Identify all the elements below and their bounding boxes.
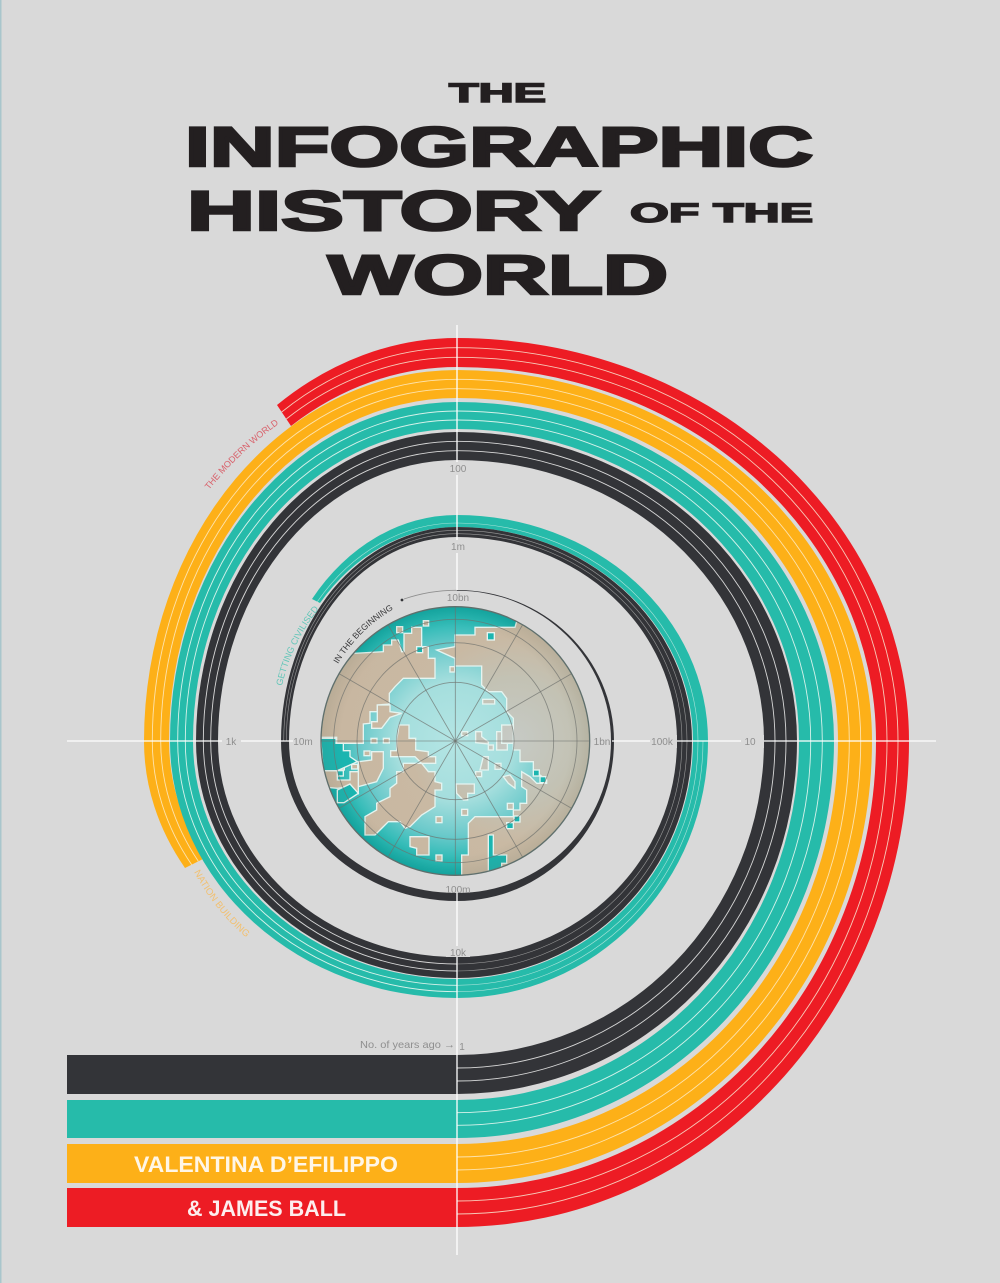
title: WORLD — [328, 243, 668, 306]
water details on land — [321, 633, 546, 875]
scale label: 10 — [741, 735, 764, 748]
scale label: 1m — [449, 540, 467, 553]
title: OF THE — [630, 198, 813, 228]
scale label: 100m: 100m — [445, 885, 471, 896]
label: the modern world: THE MODERN WORLD — [204, 420, 278, 488]
globe — [320, 606, 590, 876]
title: THE — [449, 78, 546, 108]
scale label: 10m: 10m — [293, 737, 313, 748]
scale label: 10k — [446, 946, 470, 959]
spiral: getting civilised (teal) — [170, 402, 834, 1138]
axis caption: No. of years ago → — [360, 1039, 455, 1051]
author bars — [67, 1055, 457, 1227]
scale label: 100: 100 — [450, 464, 467, 475]
scale label: 10: 10 — [744, 737, 756, 748]
rim shading — [321, 607, 590, 875]
scale label: 10k: 10k — [450, 948, 467, 959]
start dot — [401, 599, 403, 601]
label: in the beginning: IN THE BEGINNING — [333, 605, 392, 664]
title: INFOGRAPHIC — [185, 115, 813, 178]
title — [185, 78, 813, 306]
author: James Ball: & JAMES BALL — [187, 1196, 346, 1221]
land masses — [322, 620, 589, 874]
scale label: 1: 1 — [459, 1042, 465, 1053]
scale label: 1k — [222, 735, 241, 748]
author: Valentina: VALENTINA D’EFILIPPO — [134, 1152, 398, 1177]
spiral: the modern world (red) — [277, 338, 909, 1227]
scale label: 1m: 1m — [451, 542, 465, 553]
label: getting civilised: GETTING CIVILISED — [276, 606, 318, 685]
scale label: 1bn: 1bn — [594, 737, 610, 748]
scale label: 100k: 100k — [651, 737, 674, 748]
scale label: 100k — [650, 735, 677, 748]
grid circles and spokes — [321, 607, 590, 875]
spiral: nation building (yellow) — [144, 370, 872, 1183]
scale label: 100 — [446, 462, 470, 475]
title: HISTORY — [187, 179, 600, 242]
scale label: 10bn: 10bn — [447, 593, 469, 604]
spiral: in the beginning (black) — [196, 432, 797, 1094]
scale label: 1k: 1k — [226, 737, 237, 748]
left edge line — [0, 0, 2, 1283]
label: nation building: NATION BUILDING — [194, 870, 250, 936]
crosshair axes — [67, 325, 936, 1255]
